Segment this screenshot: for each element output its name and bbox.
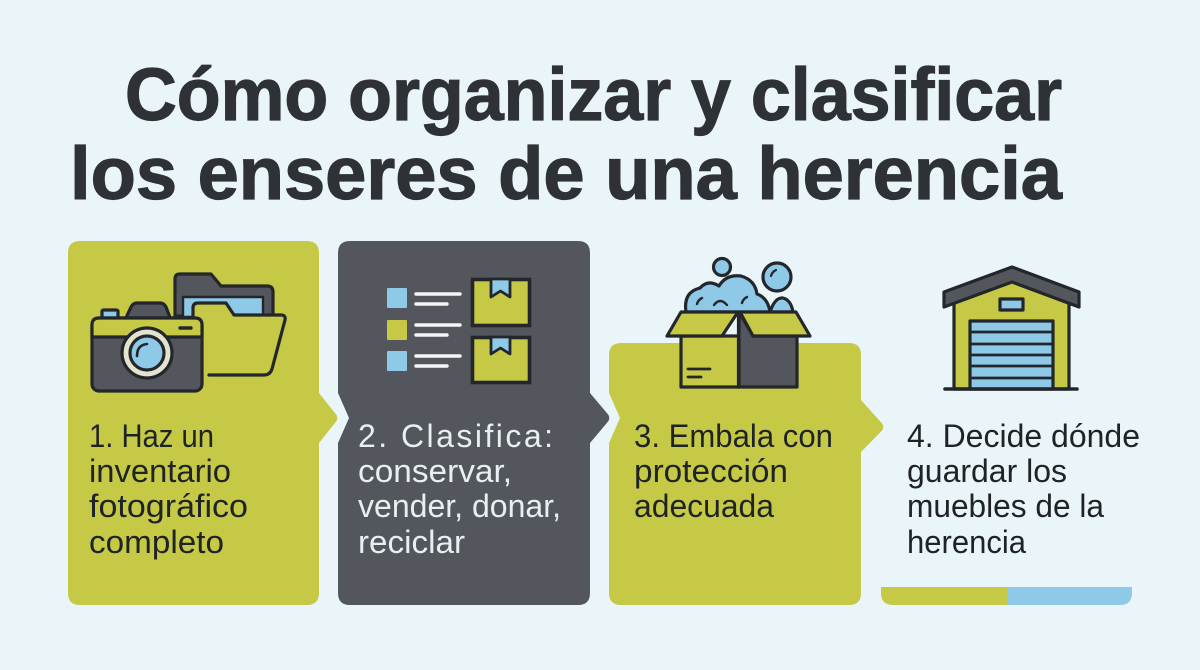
text: step 4: 4. Decide dónde [907, 418, 1140, 454]
text: step 1: 1. Haz un [89, 418, 214, 454]
panel: step 4 storage [881, 267, 1140, 605]
icon: camera and folder [92, 274, 285, 391]
text: step 4: muebles de la [907, 488, 1104, 524]
text: step 3: 3. Embala con [634, 418, 833, 454]
icon: box with bubbles [667, 258, 810, 387]
panel: step 3 pack [609, 258, 883, 605]
text: step 1: inventario [89, 453, 231, 489]
panel: step 2 classify [338, 241, 609, 605]
title: los enseres de una herencia [70, 132, 1063, 215]
panel: step 1 inventory [68, 241, 337, 605]
text: step 3: protección [634, 453, 788, 489]
text: step 1: completo [89, 524, 224, 560]
text: step 2: vender, donar, [358, 488, 561, 524]
panel 3 background [609, 343, 883, 605]
icon: checklist and boxes [387, 279, 530, 382]
text: step 1 [89, 418, 248, 560]
text: step 3: adecuada [634, 488, 774, 524]
text: step 2 [358, 418, 561, 560]
text: step 2: reciclar [358, 524, 465, 560]
text: step 4: guardar los [907, 453, 1067, 489]
bottom colour bar [881, 587, 1132, 605]
text: step 1: fotográfico [89, 488, 248, 524]
text: step 2: conservar, [358, 453, 512, 489]
text: step 3 [634, 418, 833, 524]
text: step 4 [907, 418, 1140, 560]
title: Cómo organizar y clasificar [125, 53, 1062, 136]
title [70, 53, 1063, 215]
text: step 4: herencia [907, 524, 1026, 560]
icon: storage garage [944, 267, 1079, 389]
panel 2 background [338, 241, 609, 605]
panel 1 background [68, 241, 337, 605]
text: step 2: 2. Clasifica: [358, 418, 553, 454]
